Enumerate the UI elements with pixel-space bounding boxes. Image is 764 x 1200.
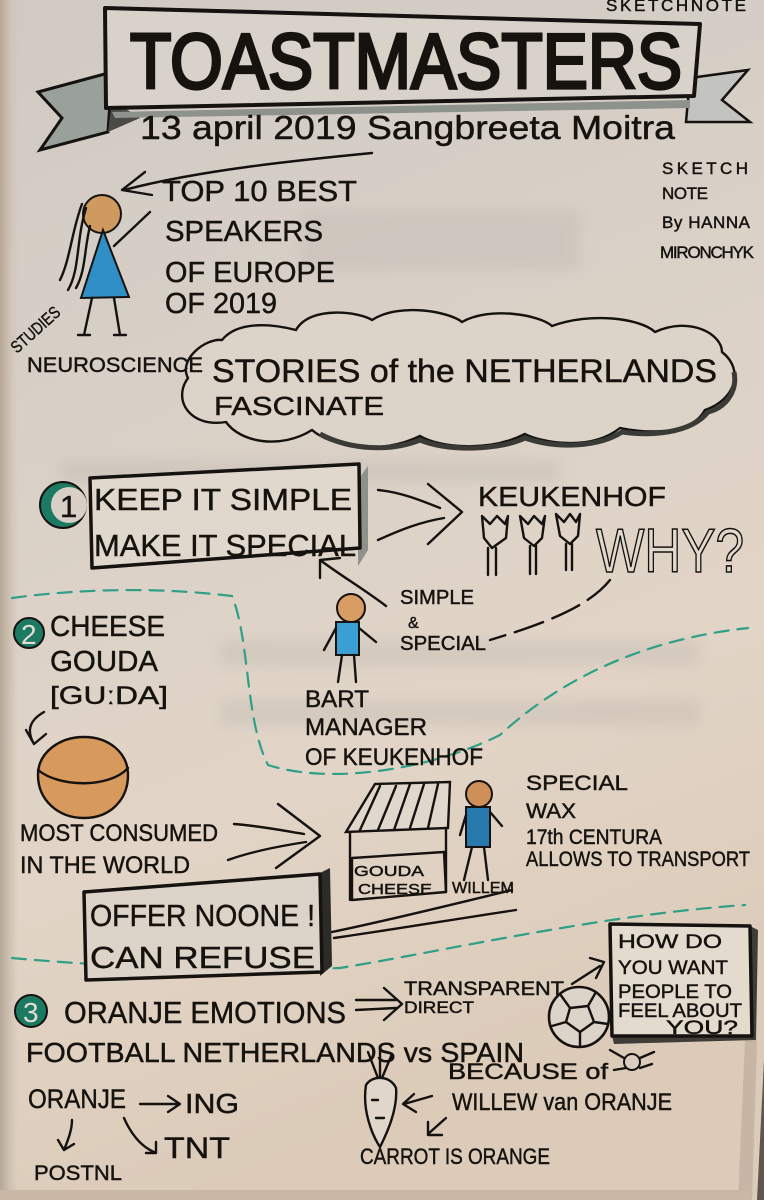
arrow: to stall <box>228 804 320 868</box>
question box: FEEL ABOUT <box>618 1001 742 1022</box>
badge: 1: 1 <box>60 489 77 524</box>
question box: PEOPLE TO <box>618 982 732 1003</box>
question box: YOU WANT <box>618 958 728 979</box>
credit: By HANNA <box>662 213 751 232</box>
cloud: stories of the Netherlands: FASCINATE <box>214 391 384 421</box>
title: TOASTMASTERS <box>130 17 682 105</box>
box: keep it simple: MAKE IT SPECIAL <box>94 528 356 563</box>
text: transparent direct <box>404 979 564 1017</box>
box: offer no one can refuse: CAN REFUSE <box>90 940 315 975</box>
arrow: to carrot <box>403 1094 432 1112</box>
teal dashed divider 1 <box>12 590 748 774</box>
badge: 2 <box>14 618 44 650</box>
credit <box>660 159 755 262</box>
text: simple and special: & <box>408 615 419 632</box>
badge: 3 <box>15 995 47 1028</box>
question box <box>610 924 758 1044</box>
text: oranje emotions: ORANJE EMOTIONS <box>64 995 346 1030</box>
text: postnl: POSTNL <box>34 1162 122 1185</box>
text: cheese gouda <box>50 611 168 710</box>
credit: MIRONCHYK <box>660 243 755 262</box>
box: offer no one can refuse <box>84 868 332 980</box>
text: neuroscience: NEUROSCIENCE <box>27 354 203 377</box>
text: willem: WILLEM <box>452 880 514 897</box>
lines: willem to box <box>332 890 516 938</box>
arrow: to keukenhof <box>378 484 462 544</box>
arrow: to postnl <box>58 1120 74 1150</box>
badge: 1 <box>40 482 87 528</box>
text: ing: ING <box>185 1088 239 1119</box>
question box: YOU? <box>666 1018 738 1039</box>
text: simple and special <box>400 587 486 655</box>
text: top speakers <box>162 176 357 320</box>
text: willem van oranje: WILLEW van ORANJE <box>452 1089 672 1116</box>
credit: NOTE <box>662 184 708 203</box>
icon: gouda cheese stall: CHEESE <box>358 881 432 898</box>
badge: 3: 3 <box>23 997 39 1028</box>
icon: gouda cheese stall <box>346 782 450 900</box>
text: cheese gouda: GOUDA <box>50 646 159 678</box>
text: cheese gouda: CHEESE <box>50 611 165 643</box>
arrow: back to box <box>320 558 386 606</box>
text: bart <box>305 686 483 771</box>
text: special wax: SPECIAL <box>526 772 628 795</box>
text: oranje: ORANJE <box>28 1084 126 1114</box>
icon: football <box>549 987 609 1047</box>
icon: carrot <box>365 1050 396 1147</box>
text: top speakers: TOP 10 BEST <box>162 176 357 208</box>
text: transparent direct: DIRECT <box>404 998 474 1017</box>
text: carrot is orange: CARROT IS ORANGE <box>360 1144 550 1169</box>
badge: 2: 2 <box>21 619 37 650</box>
text: bart: MANAGER <box>305 714 427 741</box>
icon: gouda cheese stall: GOUDA <box>354 863 424 880</box>
box: offer no one can refuse: OFFER NOONE ! <box>90 898 315 933</box>
text: bart: BART <box>305 686 369 713</box>
text: most consumed: IN THE WORLD <box>20 852 190 879</box>
icon: bart figure <box>324 594 376 682</box>
credit: SKETCH <box>662 159 748 178</box>
text: studies: STUDIES <box>7 303 64 357</box>
arrow: to cheese <box>26 712 46 744</box>
arrow: to speaker <box>122 153 372 195</box>
text: most consumed: MOST CONSUMED <box>20 820 218 847</box>
box: keep it simple <box>90 464 368 568</box>
cloud: stories of the Netherlands <box>182 310 735 448</box>
dashed line from why <box>490 580 610 640</box>
icon: speaker figure <box>60 195 150 335</box>
text: top speakers: SPEAKERS <box>165 216 323 248</box>
cloud text: STORIES of the NETHERLANDS <box>212 353 717 389</box>
text: transparent direct: TRANSPARENT <box>404 979 564 1000</box>
text: tnt: TNT <box>164 1132 230 1165</box>
icon: tulips <box>482 514 580 575</box>
text: special wax: WAX <box>526 800 576 823</box>
title banner <box>38 8 750 150</box>
arrow: to ing <box>140 1096 180 1112</box>
text: top speakers: OF 2019 <box>165 288 277 320</box>
text: bart: OF KEUKENHOF <box>305 744 483 771</box>
arrow: to carrot text <box>428 1118 446 1135</box>
text: cheese gouda: [GUːDA] <box>50 682 168 710</box>
icon: cheese <box>38 737 128 818</box>
arrow: to transparent <box>356 988 402 1020</box>
text: simple and special: SPECIAL <box>400 633 486 655</box>
icon: willem figure <box>460 781 502 880</box>
date and speaker: 13 april 2019 Sangbreeta Moitra <box>140 109 676 146</box>
text: because of: BECAUSE of <box>448 1059 609 1084</box>
text: simple and special: SIMPLE <box>400 587 474 609</box>
box: keep it simple: KEEP IT SIMPLE <box>94 482 352 517</box>
text: most consumed <box>20 820 218 879</box>
text: keukenhof: KEUKENHOF <box>478 481 666 512</box>
text: special wax <box>526 772 750 871</box>
question box: HOW DO <box>618 932 722 953</box>
teal dashed divider 2 <box>12 905 745 969</box>
text: top speakers: OF EUROPE <box>165 257 335 289</box>
arrow: to question box <box>572 958 604 984</box>
text: special wax: 17th CENTURA <box>526 826 662 849</box>
text: football: FOOTBALL NETHERLANDS vs SPAIN <box>26 1037 524 1068</box>
icon: small orange <box>610 1050 654 1070</box>
arrow: to tnt <box>124 1118 156 1153</box>
